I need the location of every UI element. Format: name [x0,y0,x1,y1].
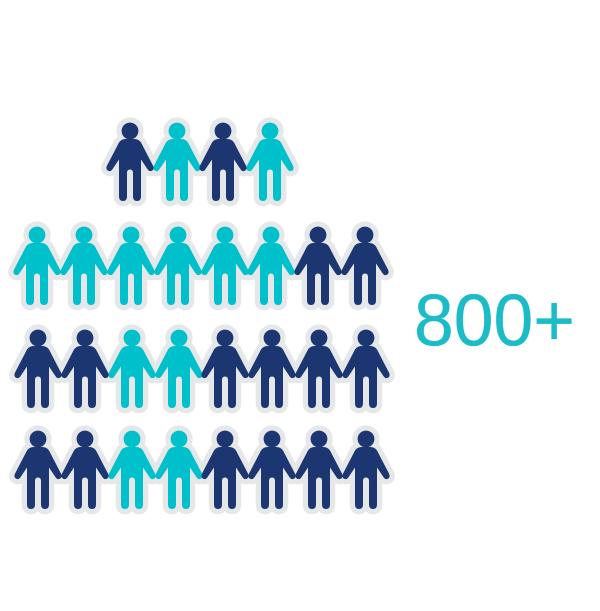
row 4 of people [14,431,390,509]
figure: 800+: 800+ [414,280,575,362]
row 3 of people [14,330,390,408]
row 2 of people [13,227,389,305]
row 1 of people [106,123,294,201]
